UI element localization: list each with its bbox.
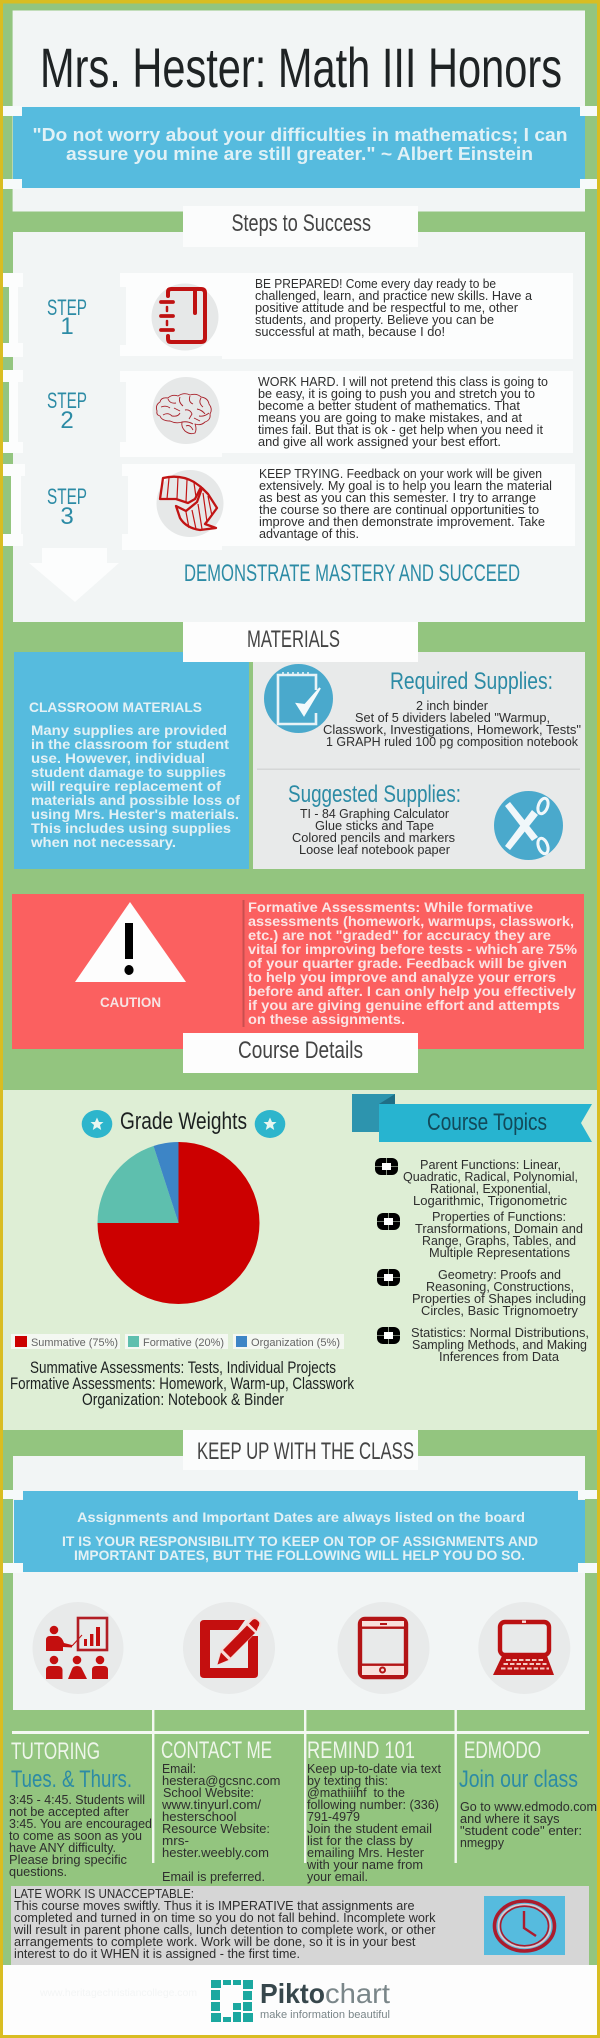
topic: statistics: Inferences from Data (439, 1349, 560, 1364)
assessment descriptions: Formative Assessments: Homework, Warm-up, Classwork (10, 1374, 354, 1393)
column: contact me: School Website: (163, 1785, 254, 1800)
grade weights heading: Grade Weights (120, 1108, 247, 1135)
column: tutoring: not be accepted after (9, 1804, 130, 1819)
assessment descriptions: Organization: Notebook & Binder (82, 1390, 284, 1409)
column: remind 101: list for the class by (307, 1833, 413, 1848)
formative assessments text (248, 899, 578, 1027)
column: contact me: Email: (162, 1761, 196, 1776)
panel: keep up background (13, 1456, 585, 1710)
step 2 text: and give all work assigned your best effort. (258, 434, 501, 449)
required supplies (323, 668, 581, 749)
heading: steps to success (183, 206, 418, 247)
quote banner (3, 106, 597, 189)
column: tutoring: 3:45. You are encouraged (9, 1816, 152, 1831)
step 1 label: 1 (60, 313, 74, 340)
step 2 (47, 371, 573, 457)
formative assessments text: etc.) are not "graded" for accuracy they are (248, 927, 551, 943)
suggested supplies: Loose leaf notebook paper (299, 842, 451, 857)
topic: properties of functions: Properties of Functions: (432, 1209, 566, 1224)
step 1 text: positive attitude and be respectful to me, other (255, 300, 519, 315)
column: remind 101: following number: (336) (307, 1797, 439, 1812)
panel: late work: completed and turned in on time so you do not fall behind. Incomplete work (14, 1910, 436, 1925)
topic: properties of functions: Transformations, Domain and (415, 1221, 583, 1236)
required supplies: 1 GRAPH ruled 100 pg composition notebook (326, 734, 578, 749)
step 3 label: STEP (47, 484, 87, 509)
column: contact me: mrs- (162, 1833, 189, 1848)
topic: statistics: Sampling Methods, and Making (412, 1337, 587, 1352)
heading: materials: MATERIALS (247, 626, 340, 653)
step 3 text: improve and then demonstrate improvement. Take (259, 514, 545, 529)
topic: properties of functions (377, 1209, 583, 1260)
heading: keep up with the class: KEEP UP WITH THE CLASS (197, 1438, 414, 1465)
column: tutoring: to come as soon as you (9, 1828, 142, 1843)
panel: course details (3, 1090, 597, 1430)
pie chart (98, 1142, 260, 1304)
quote banner: "Do not worry about your difficulties in mathematics; I can (32, 125, 568, 145)
column: contact me: hesterschool (162, 1809, 237, 1824)
column: contact me (161, 1737, 280, 1884)
step 1 (47, 273, 573, 359)
piktochart wordmark: Pikto (260, 1978, 325, 2009)
column: edmodo: nmegpy (460, 1835, 504, 1850)
chart legend: Organization (5%) (251, 1337, 340, 1349)
panel: classroom materials: materials and possible loss of (31, 792, 240, 808)
column: remind 101: @mathiiihf to the (307, 1785, 405, 1800)
formative assessments text: of your quarter grade. Feedback will be given (248, 955, 567, 971)
step 2 text: times fail. But that is ok - get help when you need it (258, 422, 543, 437)
step 3 text: extensively. My goal is to help you learn the material (259, 478, 552, 493)
responsibility banner: IMPORTANT DATES, BUT THE FOLLOWING WILL HELP YOU DO SO. (74, 1547, 525, 1563)
suggested supplies: Suggested Supplies: (288, 781, 461, 808)
panel: classroom materials: using Mrs. Hester's materials. (31, 806, 239, 822)
topic: properties of functions: Multiple Representations (429, 1245, 570, 1260)
suggested supplies: TI - 84 Graphing Calculator (300, 806, 450, 821)
column: tutoring: TUTORING (11, 1738, 100, 1765)
step 2 label (47, 388, 87, 434)
responsibility banner: Assignments and Important Dates are always listed on the board (77, 1509, 525, 1525)
course topics ribbon: Course Topics (427, 1109, 547, 1136)
column: remind 101: 791-4979 (307, 1809, 360, 1824)
step 1 label (47, 295, 87, 340)
column: remind 101: Join the student email (307, 1821, 432, 1836)
step 1 label: STEP (47, 295, 87, 320)
suggested supplies: Colored pencils and markers (292, 830, 455, 845)
icon: edmodo laptop (478, 1602, 570, 1694)
required supplies: Set of 5 dividers labeled "Warmup, (355, 710, 550, 725)
arrow: down (29, 548, 119, 602)
column: edmodo: and where it says (460, 1811, 560, 1826)
icon: tutoring presenter (32, 1602, 124, 1694)
panel: classroom materials: will require replacement of (30, 778, 221, 794)
icon: checklist (264, 664, 333, 733)
formative assessments text: assessments (homework, warmups, classwork, (248, 913, 574, 929)
step 1 text: successful at math, because I do! (255, 324, 445, 339)
formative assessments text: to help you improve and analyze your errors (248, 969, 556, 985)
icon: notebook (161, 289, 205, 342)
column: remind 101 (306, 1737, 441, 1884)
course topics ribbon (352, 1094, 592, 1142)
panel: classroom materials: CLASSROOM MATERIALS (29, 699, 202, 715)
step 3 text: advantage of this. (259, 526, 359, 541)
topic: statistics (377, 1325, 589, 1364)
step ribbons (3, 232, 25, 622)
topic: parent functions: Quadratic, Radical, Polynomial, (403, 1169, 578, 1184)
heading: steps to success: Steps to Success (232, 210, 371, 237)
step 1 text: challenged, learn, and practice new skills. Have a (255, 288, 533, 303)
icon: clock (484, 1896, 565, 1955)
column: tutoring: Please bring specific (9, 1852, 127, 1867)
column: contact me: Email is preferred. (162, 1869, 265, 1884)
column: remind 101: with your name from (306, 1857, 423, 1872)
panel: header (13, 10, 585, 212)
icon: remind tablet (338, 1602, 430, 1694)
heading: keep up with the class (183, 1430, 418, 1470)
column: tutoring: questions. (9, 1864, 67, 1879)
panel: late work: will result in parent phone calls, lunch detention to complete work, or other (13, 1922, 436, 1937)
step 3 text: KEEP TRYING. Feedback on your work will be given (259, 466, 542, 481)
topic: properties of functions: Range, Graphs, Tables, and (422, 1233, 576, 1248)
panel: steps background (13, 232, 585, 622)
topic: geometry (377, 1267, 586, 1318)
panel: supplies (253, 652, 585, 869)
topic: geometry: Reasoning, Constructions, (426, 1279, 574, 1294)
panel: late work: This course moves swiftly. Thus it is IMPERATIVE that assignments are (14, 1898, 414, 1913)
topic: parent functions: Rational, Exponential, (430, 1181, 551, 1196)
required supplies: 2 inch binder (416, 698, 489, 713)
responsibility banner: IT IS YOUR RESPONSIBILITY TO KEEP ON TOP OF ASSIGNMENTS AND (62, 1533, 538, 1549)
column: remind 101: Keep up-to-date via text (307, 1761, 441, 1776)
icon: contact edit (183, 1602, 275, 1694)
column: contact me: Resource Website: (162, 1821, 270, 1836)
panel: late work: interest to do it WHEN it is assigned - the first time. (14, 1946, 300, 1961)
column: edmodo (459, 1737, 597, 1850)
column: contact me: hestera@gcsnc.com (162, 1773, 280, 1788)
panel: late work: arrangements to complete work. Work will be done, so it is in your best (14, 1934, 416, 1949)
column: tutoring: Tues. & Thurs. (11, 1766, 132, 1793)
step 3 text: as best as you can this semester. I try to arrange (259, 490, 536, 505)
panel: classroom materials: in the classroom for student (31, 736, 229, 752)
panel: classroom materials: This includes using supplies (31, 820, 231, 836)
step 1 text: BE PREPARED! Come every day ready to be (255, 276, 496, 291)
column: tutoring (9, 1738, 152, 1879)
required supplies: Classwork, Investigations, Homework, Tests" (323, 722, 581, 737)
assessment descriptions: Summative Assessments: Tests, Individual Projects (30, 1358, 336, 1377)
step 3 label (47, 484, 87, 530)
column: remind 101: by texting this: (307, 1773, 388, 1788)
step 3 label: 3 (60, 503, 74, 530)
column: contact me: CONTACT ME (161, 1737, 272, 1764)
column: edmodo: Go to www.edmodo.com (460, 1799, 597, 1814)
icon: looping arrows (160, 477, 217, 530)
step 2 label: 2 (60, 407, 74, 434)
suggested supplies (288, 781, 461, 857)
step 1 text (255, 276, 533, 339)
footer (3, 1965, 597, 2035)
piktochart wordmark: chart (325, 1978, 390, 2009)
chart legend: Summative (75%) (31, 1337, 118, 1349)
step 2 text: become a better student of mathematics. That (258, 398, 520, 413)
column: remind 101: your email. (307, 1869, 368, 1884)
formative assessments text: before and after. I can only help you effectively (248, 983, 576, 999)
column: tutoring: have ANY difficulty. (9, 1840, 116, 1855)
required supplies: Required Supplies: (390, 668, 553, 695)
icon: scissors (494, 791, 563, 860)
formative assessments text: Formative Assessments: While formative (248, 899, 533, 915)
topic: parent functions: Parent Functions: Linear, (420, 1157, 561, 1172)
piktochart wordmark: make information beautiful (260, 2009, 390, 2021)
step 1 text: students, and property. Believe you can be (255, 312, 494, 327)
icon: brain (156, 394, 211, 434)
topic: parent functions: Logarithmic, Trigonometric (413, 1193, 567, 1208)
icon: warning triangle (75, 902, 186, 982)
chart legend (11, 1334, 344, 1349)
panel: classroom materials: student damage to supplies (31, 764, 226, 780)
step 2 text (258, 374, 548, 449)
panel: classroom materials: use. However, individual (31, 750, 205, 766)
topic: geometry: Properties of Shapes including (412, 1291, 586, 1306)
piktochart wordmark (260, 1978, 390, 2021)
topic: geometry: Circles, Basic Trignomoetry (421, 1303, 578, 1318)
step 3 (47, 464, 575, 550)
heading: materials (183, 622, 418, 662)
responsibility banner (3, 1490, 597, 1573)
panel: classroom materials (14, 652, 249, 869)
chart legend: Formative (20%) (143, 1337, 224, 1349)
assessment descriptions (10, 1358, 354, 1409)
step 2 label: STEP (47, 388, 87, 413)
piktochart logo mark (211, 1980, 253, 2022)
suggested supplies: Glue sticks and Tape (315, 818, 434, 833)
column: tutoring: 3:45 - 4:45. Students will (9, 1792, 145, 1807)
column: remind 101: REMIND 101 (307, 1737, 415, 1764)
formative assessments text: on these assignments. (248, 1011, 405, 1027)
column: edmodo: "student code" enter: (460, 1823, 582, 1838)
quote banner: assure you mine are still greater." ~ Albert Einstein (66, 144, 533, 164)
formative assessments text: vital for improving before tests - which are 75% (248, 941, 578, 957)
column: edmodo: EDMODO (464, 1737, 541, 1764)
topic: parent functions (375, 1157, 578, 1208)
panel: late work: LATE WORK IS UNACCEPTABLE: (14, 1886, 194, 1901)
formative assessments text: if you are giving genuine effort and attempts (248, 997, 560, 1013)
step 2 text: be easy, it is going to push you and stretch you to (258, 386, 535, 401)
column: contact me: www.tinyurl.com/ (161, 1797, 261, 1812)
panel: late work (11, 1886, 589, 1965)
column dividers (12, 1710, 589, 1863)
panel: caution (12, 894, 584, 1049)
step 2 text: WORK HARD. I will not pretend this class is going to (258, 374, 548, 389)
column: contact me: hester.weebly.com (162, 1845, 269, 1860)
topic: geometry: Geometry: Proofs and (438, 1267, 561, 1282)
heading: course details (183, 1033, 418, 1073)
step 3 text: the course so there are continual opportunities to (259, 502, 539, 517)
heading: course details: Course Details (238, 1037, 363, 1064)
panel: classroom materials: Many supplies are provided (31, 722, 227, 738)
column: remind 101: emailing Mrs. Hester (307, 1845, 425, 1860)
panel: classroom materials: when not necessary. (30, 834, 176, 850)
topic: statistics: Statistics: Normal Distributions, (411, 1325, 589, 1340)
step 3 text (259, 466, 552, 541)
footer: www.heritagechristiancollege.com (39, 1988, 197, 1999)
step 2 text: means you are going to make mistakes, and at (258, 410, 522, 425)
panel: caution: CAUTION (100, 994, 161, 1010)
